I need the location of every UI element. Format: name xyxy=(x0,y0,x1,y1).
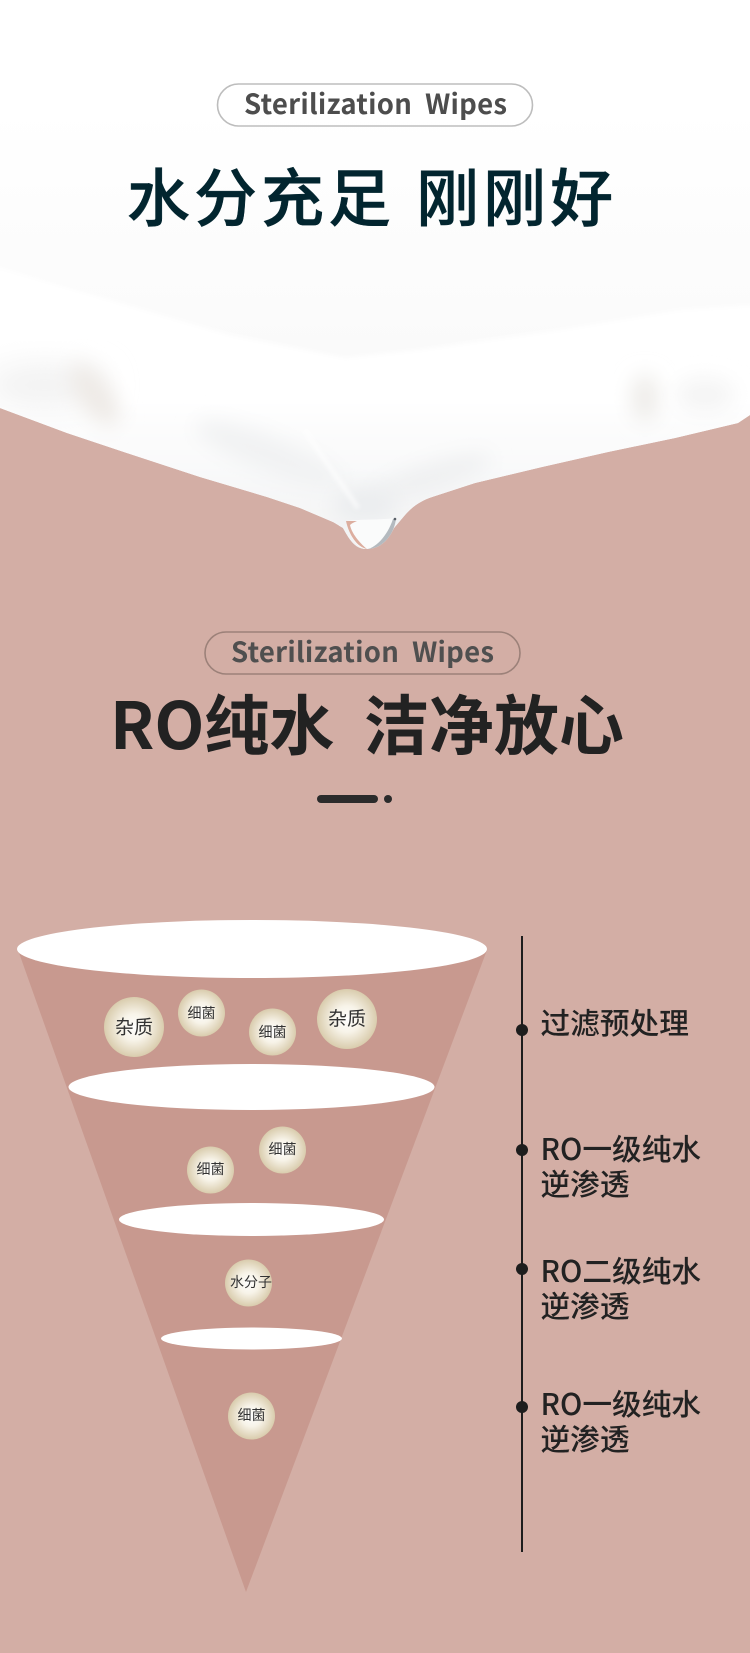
step label: RO stage 1: 逆渗透 xyxy=(540,1161,630,1204)
title: RO pure water: RO纯水 洁净放心 xyxy=(110,674,624,768)
particle: bacteria 5 xyxy=(228,1392,275,1440)
step label: RO stage 1 repeat: 逆渗透 xyxy=(540,1416,630,1459)
particle: bacteria 4 xyxy=(187,1146,234,1194)
funnel layer 3 xyxy=(119,1203,384,1236)
particle: bacteria 5: 细菌 xyxy=(238,1405,266,1425)
funnel layer 1 xyxy=(17,920,487,978)
particle: water molecule xyxy=(225,1260,272,1306)
pill label second: Sterilization Wipes xyxy=(231,630,494,670)
particle: bacteria 2 xyxy=(249,1008,296,1056)
particle: impurity 1 xyxy=(104,997,164,1057)
divider dash and dot xyxy=(317,795,392,803)
title: moisture: 水分充足 刚刚好 xyxy=(127,149,617,240)
step label: RO stage 2 xyxy=(540,1248,701,1326)
particle: impurity 1: 杂质 xyxy=(115,1012,153,1040)
particle: bacteria 4: 细菌 xyxy=(196,1159,224,1179)
wipe photo with water drop xyxy=(0,0,750,560)
step label: RO stage 2: 逆渗透 xyxy=(540,1283,630,1326)
funnel layer 2 xyxy=(68,1064,434,1110)
pill label top: Sterilization Wipes xyxy=(244,82,507,122)
step label: RO stage 1 repeat: RO一级纯水 xyxy=(540,1381,701,1424)
particle: bacteria 3 xyxy=(259,1126,306,1174)
funnel diagram xyxy=(17,920,487,1592)
funnel layer 4 xyxy=(161,1328,342,1350)
particle: bacteria 3: 细菌 xyxy=(268,1139,296,1159)
particle: bacteria 1: 细菌 xyxy=(188,1003,216,1023)
particle: bacteria 2: 细菌 xyxy=(258,1022,286,1042)
particle: bacteria 1 xyxy=(178,990,225,1036)
particle: impurity 2: 杂质 xyxy=(328,1004,366,1031)
funnel cone xyxy=(18,950,487,1592)
particle: impurity 2 xyxy=(317,989,377,1049)
step label: RO stage 2: RO二级纯水 xyxy=(540,1248,701,1291)
particle: water molecule: 水分子 xyxy=(230,1272,272,1292)
timeline axis xyxy=(516,936,528,1552)
step label: RO stage 1: RO一级纯水 xyxy=(540,1126,701,1169)
step label: RO stage 1 xyxy=(540,1126,701,1204)
step label: RO stage 1 repeat xyxy=(540,1381,701,1459)
step label: pre-filtration: 过滤预处理 xyxy=(540,1000,689,1043)
water drop xyxy=(346,518,396,549)
